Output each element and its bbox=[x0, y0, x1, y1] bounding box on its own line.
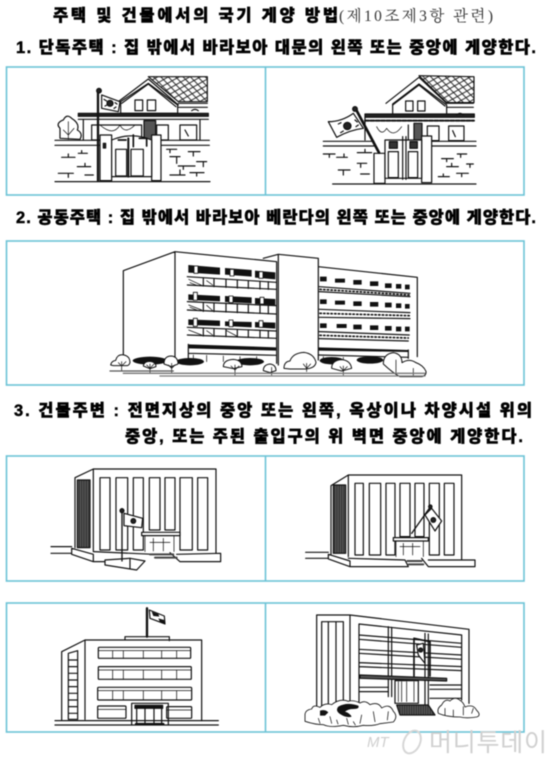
heading 1: detached house: 1. 단독주택 : 집 밖에서 바라보아 대문의 왼쪽 또는 중앙에 게양한다. bbox=[16, 37, 536, 57]
title: (제10조제3항 관련) bbox=[339, 6, 493, 25]
panel: rooftop and entrance wall flag examples bbox=[6, 603, 524, 732]
illustration: apartment block with balcony flags bbox=[110, 252, 426, 377]
panel: ground-level and wall flag examples bbox=[6, 456, 524, 581]
illustration: house with flag angled from gate post bbox=[323, 76, 477, 184]
watermark: MoneyToday logo: MT bbox=[367, 734, 390, 751]
illustration: office building with rooftop flag bbox=[55, 608, 218, 725]
watermark: MoneyToday logo: 머니투데이 bbox=[429, 729, 547, 757]
panel: apartment example bbox=[6, 241, 524, 385]
right wing balconies bbox=[319, 277, 410, 341]
illustration: office building with flag on ground left of entrance bbox=[51, 469, 221, 570]
illustration: office building with flag on wall above entrance bbox=[305, 615, 479, 727]
illustration: office building with flag angled above entrance bbox=[306, 475, 475, 567]
heading 3: around buildings bbox=[14, 401, 532, 446]
panel: detached house examples bbox=[6, 67, 524, 195]
title: 주택 및 건물에서의 국기 게양 방법 bbox=[53, 5, 338, 25]
title bbox=[53, 5, 493, 25]
shrubs bbox=[305, 698, 479, 727]
heading 3: around buildings: 3. 건물주변 : 전면지상의 중앙 또는 왼쪽, 옥상이나 차양시설 위의 bbox=[14, 401, 532, 420]
heading 2: apartment: 2. 공동주택 : 집 밖에서 바라보아 베란다의 왼쪽 또는 중앙에 게양한다. bbox=[16, 207, 536, 227]
illustration: house with flag left of gate bbox=[55, 77, 210, 182]
left wing balconies bbox=[187, 265, 276, 338]
shrubs bbox=[111, 352, 426, 377]
watermark: MoneyToday logo bbox=[367, 728, 547, 757]
heading 3: around buildings: 중앙, 또는 주된 출입구의 위 벽면 중앙에 게양한다. bbox=[125, 427, 523, 446]
